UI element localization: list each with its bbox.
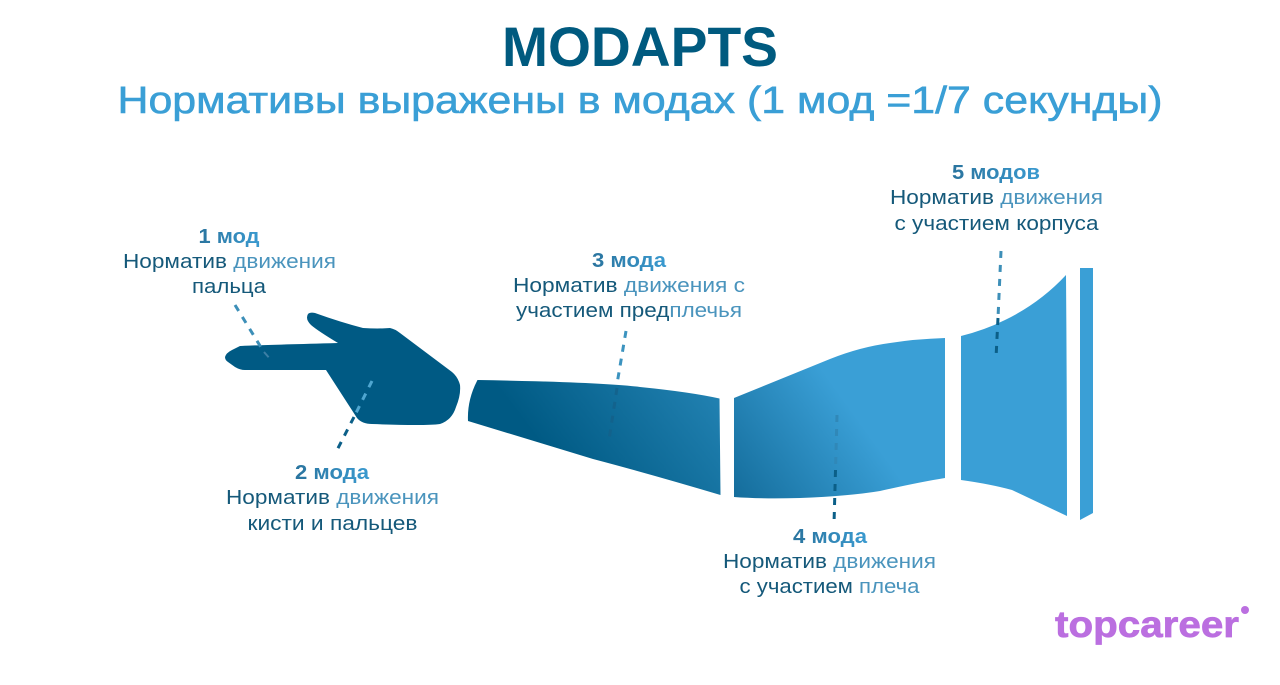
label: 5 modov	[890, 162, 1103, 235]
title: MODAPTS	[502, 15, 778, 78]
label: 3 moda	[513, 250, 745, 322]
label: 4 moda: Норматив движения	[723, 551, 936, 573]
label: 3 moda: Норматив движения с	[513, 275, 745, 297]
label: 2 moda: Норматив движения	[226, 487, 439, 509]
label: 5 modov: Норматив движения	[890, 187, 1103, 209]
label: 4 moda: с участием плеча	[740, 576, 920, 598]
dashed leader: 4 moda	[834, 415, 837, 524]
arm diagram	[225, 268, 1093, 520]
hand	[225, 313, 460, 425]
label: 4 moda: 4 мода	[793, 526, 868, 548]
label: 5 modov: с участием корпуса	[894, 213, 1099, 235]
dashed leader: 5 modov	[996, 251, 1001, 358]
label: 2 moda: кисти и пальцев	[248, 513, 418, 535]
label: 3 moda: 3 мода	[592, 250, 667, 272]
shoulder	[961, 275, 1067, 516]
label: 1 mod: 1 мод	[198, 226, 260, 248]
dashed leader: 2 moda	[335, 381, 372, 454]
dashed leader: 1 mod	[235, 305, 271, 360]
label: 1 mod	[123, 226, 336, 298]
logo: topcareer: topcareer	[1055, 604, 1239, 645]
label: 3 moda: участием пред плечья	[516, 300, 742, 322]
label: 4 moda	[723, 526, 936, 598]
upper arm	[734, 338, 945, 498]
label: 5 modov: 5 модов	[952, 162, 1040, 184]
torso strip	[1080, 268, 1093, 520]
label: 2 moda	[226, 462, 439, 535]
label: 1 mod: пальца	[192, 276, 267, 298]
label: 1 mod: Норматив движения	[123, 251, 336, 273]
dashed leader: 3 moda	[609, 331, 626, 440]
forearm	[468, 380, 720, 495]
subtitle: Нормативы выражены в модах (1 мод =1/7 секунды)	[118, 80, 1162, 122]
label: 2 moda: 2 мода	[295, 462, 370, 484]
